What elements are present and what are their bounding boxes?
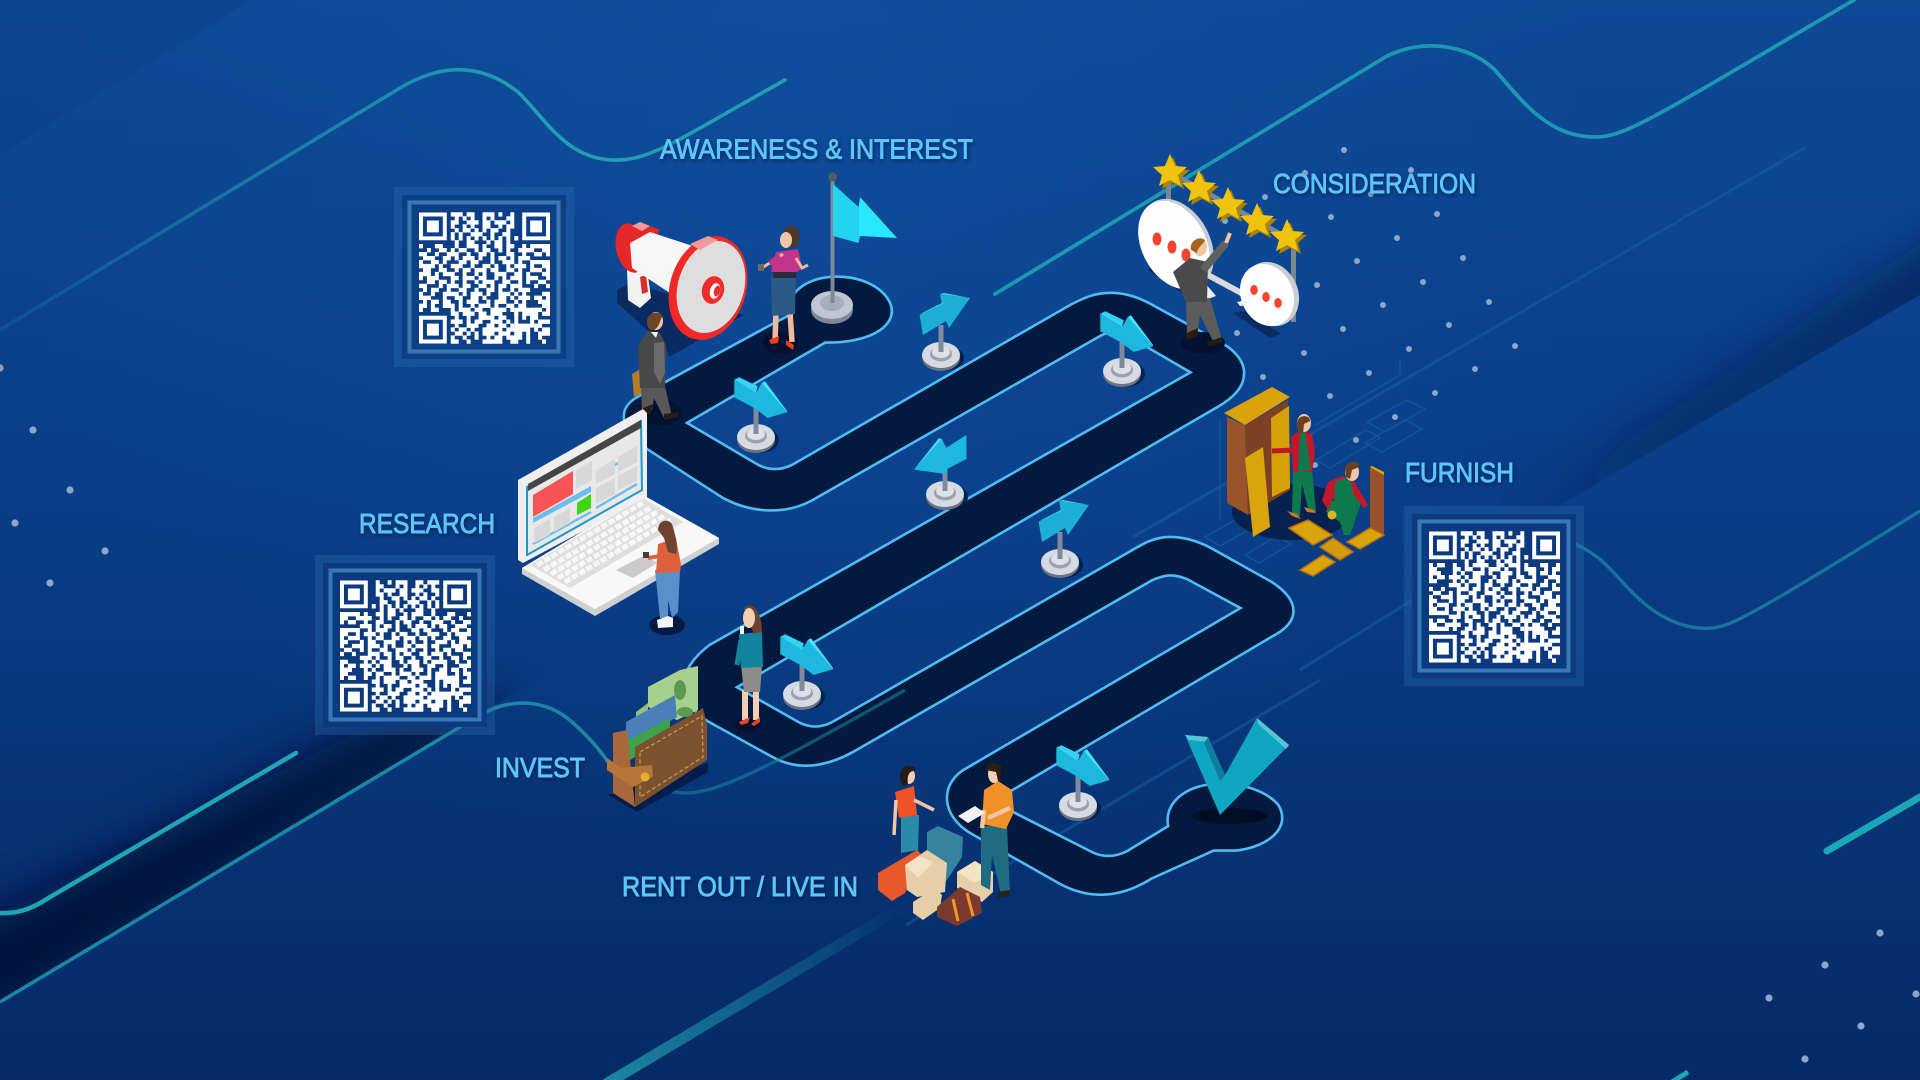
faint blueprint outlines (1205, 360, 1425, 563)
line: bottom right thick (1827, 797, 1920, 851)
person: woman with phone (735, 605, 763, 732)
wallet (607, 666, 708, 812)
arrow post C (1100, 311, 1153, 387)
person: woman with cup (758, 226, 808, 354)
line: bottom edge (1672, 1072, 1688, 1080)
speech bubbles and star rating (1124, 154, 1309, 338)
heading: furnish: FURNISH (1405, 457, 1514, 488)
heading: invest: INVEST (495, 752, 585, 783)
megaphone (611, 220, 760, 357)
line: bottom thick (606, 905, 906, 1080)
heading: consideration: CONSIDERATION (1273, 168, 1476, 199)
person: man pointing at rating (1173, 233, 1230, 354)
person: man in orange shirt with clipboard (958, 763, 1014, 898)
furnish workers and wardrobe (1224, 387, 1384, 576)
check mark (1185, 718, 1289, 824)
faint diagonal lines (906, 147, 1806, 925)
arrow post G (1056, 745, 1109, 821)
worker kneeling (1322, 462, 1368, 535)
arrow post D (914, 435, 968, 510)
worker standing (1272, 414, 1316, 519)
wavy line: lower right (1565, 511, 1920, 628)
faint wave over road (665, 690, 905, 793)
wavy line: upper right (995, 0, 1854, 294)
background dots: bottom right (1765, 929, 1920, 1063)
arrow post E (1039, 500, 1089, 578)
winding road (624, 277, 1294, 895)
arrow post F (780, 634, 833, 710)
moving boxes and luggage (878, 826, 993, 926)
person: businessman with briefcase (632, 312, 681, 426)
heading: rent out or live in: RENT OUT / LIVE IN (622, 871, 858, 902)
flag (811, 172, 897, 324)
qr code: furnish (1404, 506, 1584, 686)
person: woman at laptop (643, 521, 685, 635)
heading: research: RESEARCH (359, 508, 495, 539)
heading: awareness and interest: AWARENESS & INTEREST (660, 134, 973, 164)
wavy line: lower left (0, 703, 608, 1002)
qr code: research (315, 555, 495, 735)
arrow post B (920, 293, 970, 371)
person: woman in orange shirt (894, 766, 934, 853)
background dots: upper right (1222, 147, 1518, 468)
laptop (518, 409, 719, 616)
background dots: left (0, 364, 109, 587)
arrow post A (734, 377, 787, 453)
qr code: awareness (394, 187, 574, 367)
wavy line: upper left (0, 70, 785, 330)
line: lower left teal (0, 753, 296, 913)
